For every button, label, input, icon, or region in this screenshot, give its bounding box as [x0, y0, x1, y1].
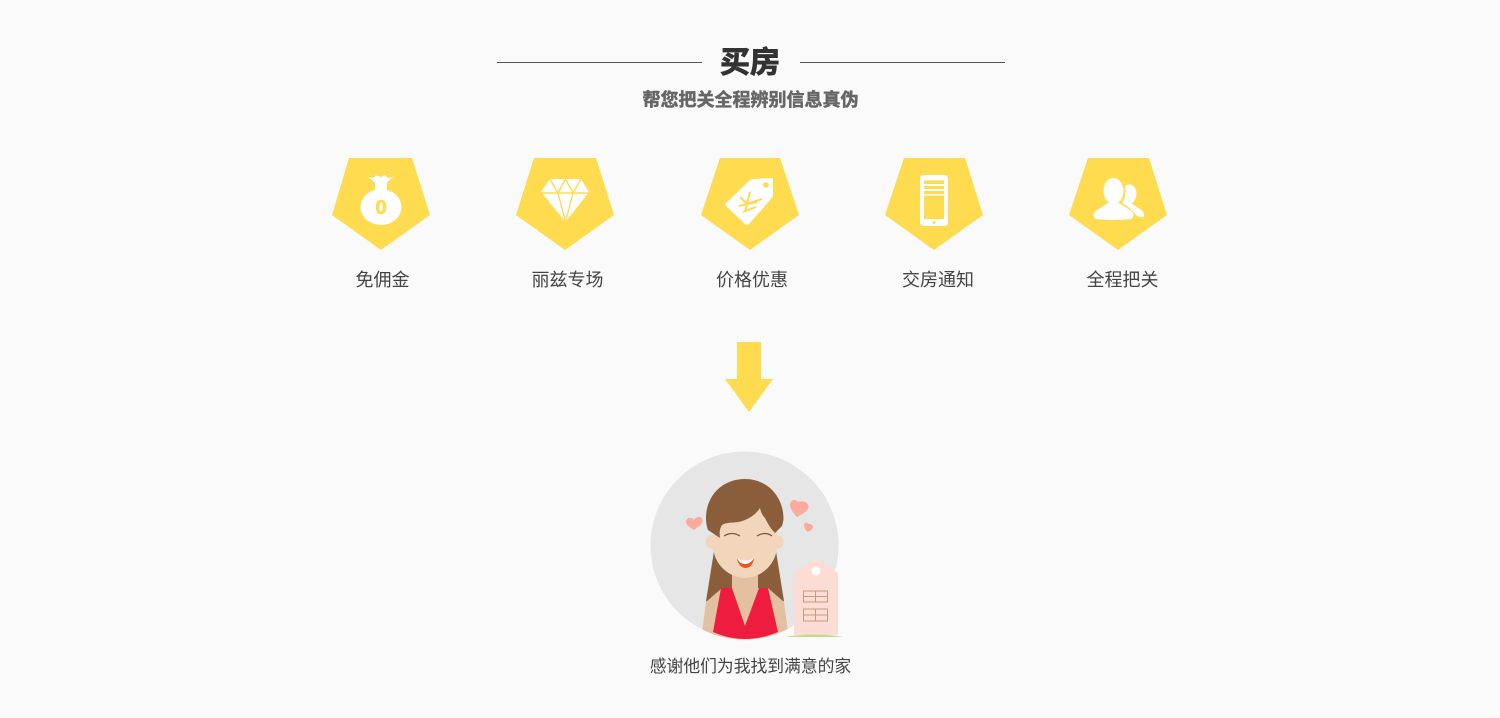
feature: full-process check [1069, 158, 1167, 290]
head [706, 479, 784, 578]
icon: price tag [701, 158, 799, 250]
icon: money bag: 0 [375, 197, 387, 219]
icon: users [1069, 158, 1167, 250]
label: 全程把关 [1086, 270, 1158, 290]
subtitle: 帮您把关全程辨别信息真伪 [642, 89, 858, 110]
icon: diamond [516, 158, 614, 250]
label: 免佣金 [356, 270, 410, 290]
woman [701, 545, 789, 640]
illustration: happy customer with house tag [650, 452, 843, 640]
arrow: down [725, 342, 773, 412]
label: 价格优惠 [716, 270, 788, 290]
feature: free commission [332, 158, 430, 290]
feature: handover notice [885, 158, 983, 290]
icon: smartphone [885, 158, 983, 250]
feature: Ritz zone [516, 158, 614, 290]
title: 买房 [720, 46, 780, 80]
label: 丽兹专场 [532, 270, 604, 290]
feature: price discount [701, 158, 799, 290]
house tag [785, 558, 843, 637]
caption: 感谢他们为我找到满意的家 [650, 657, 851, 676]
label: 交房通知 [902, 270, 974, 290]
hearts [686, 500, 813, 532]
background circle [650, 452, 838, 640]
